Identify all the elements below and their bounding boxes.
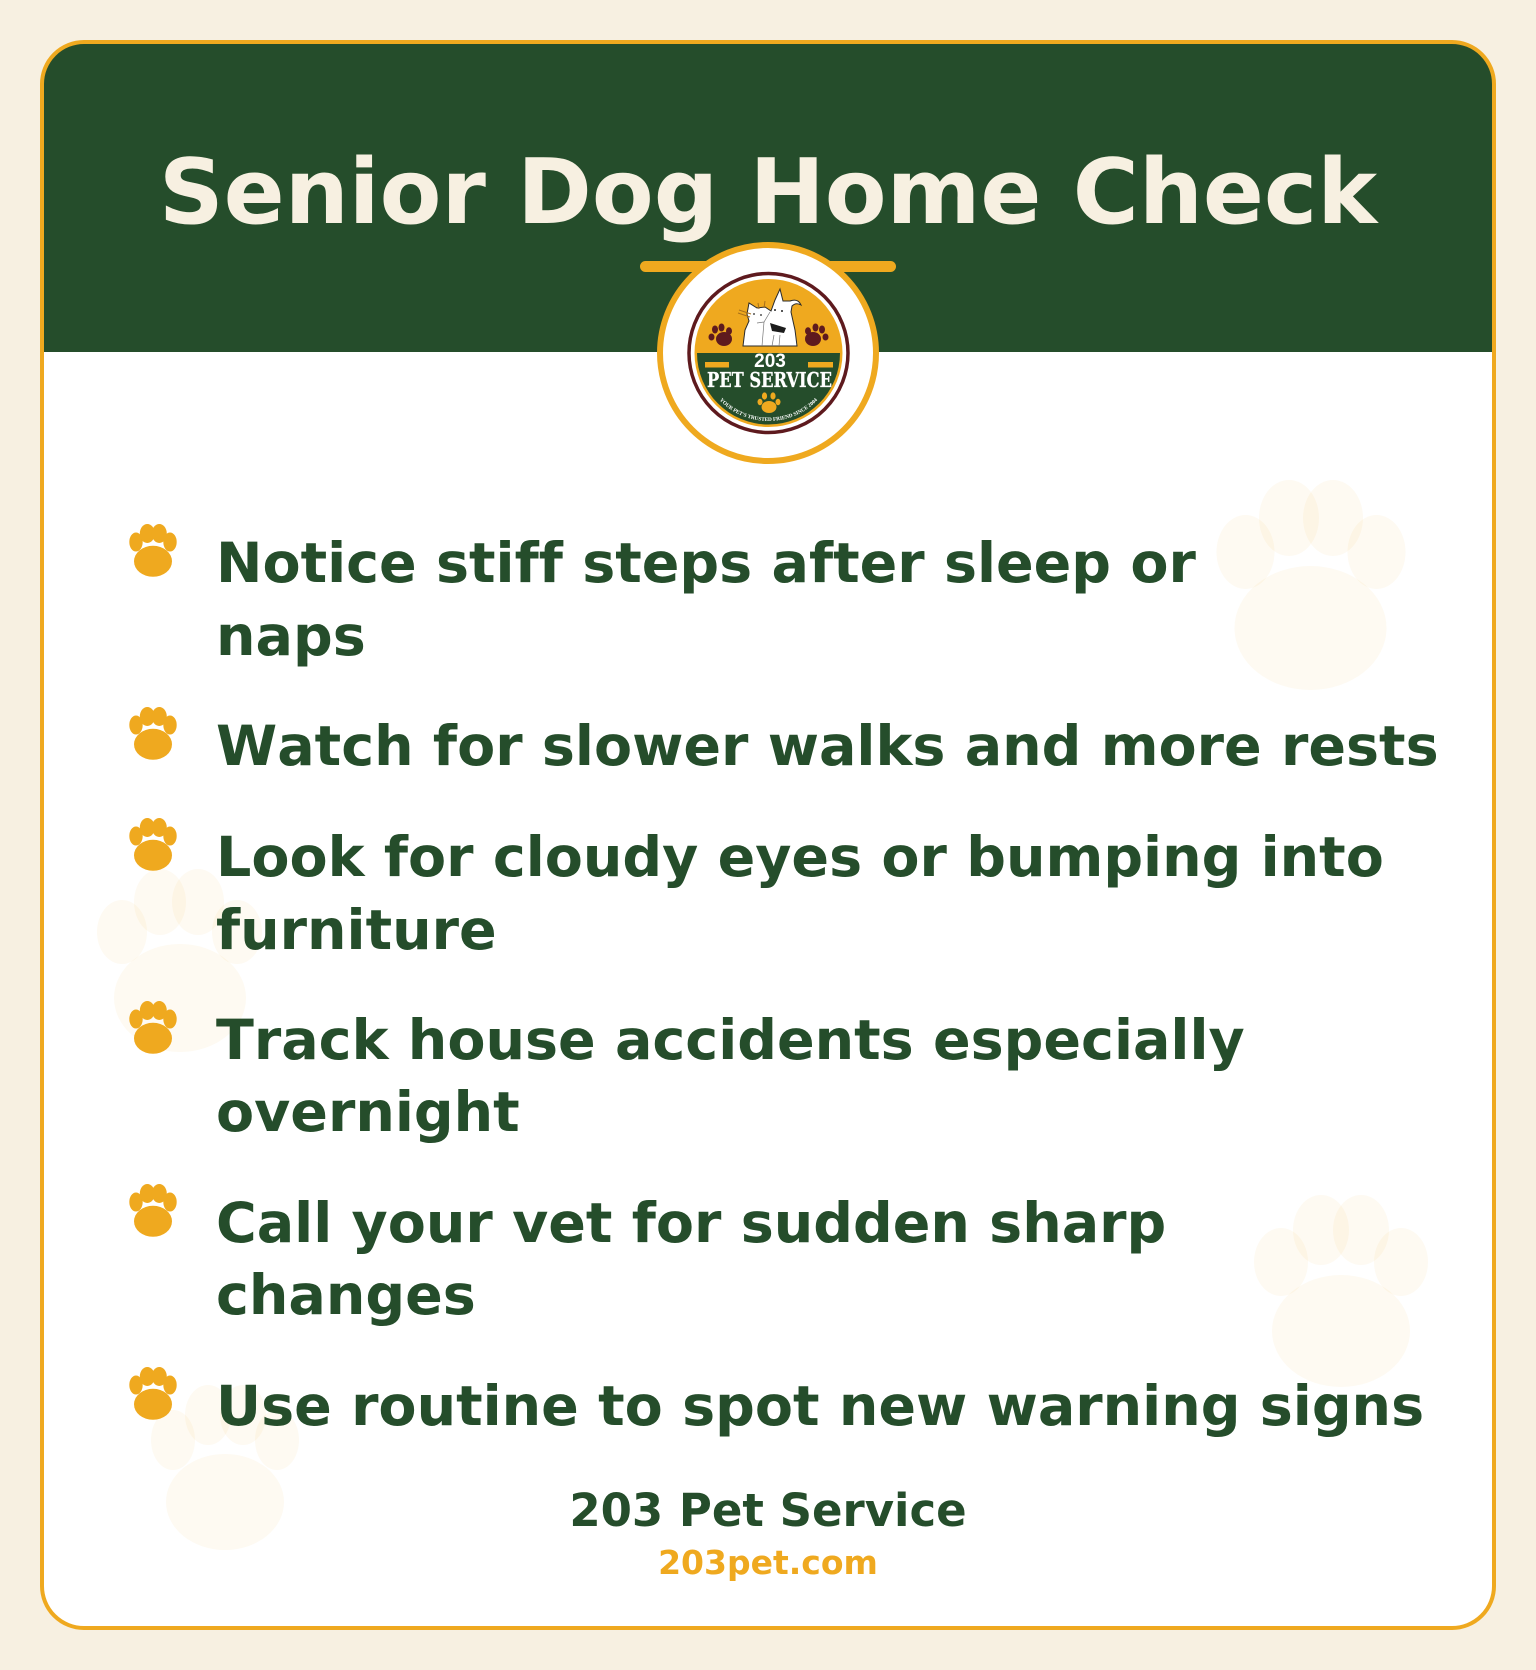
logo bars — [705, 362, 833, 368]
logo disc — [694, 279, 842, 427]
title: Senior Dog Home Check — [159, 140, 1377, 245]
list item 5: Call your vet for sudden sharp — [216, 1191, 1166, 1256]
bullet paw — [129, 524, 177, 577]
background paw: bottom right — [1254, 1195, 1428, 1387]
footer brand name: 203 Pet Service — [569, 1484, 967, 1537]
list item 1 — [129, 524, 1196, 669]
list item 6: Use routine to spot new warning signs — [216, 1374, 1424, 1439]
divider bar — [640, 261, 896, 272]
logo cat and dog — [738, 289, 801, 346]
list item 4: overnight — [216, 1080, 520, 1145]
logo text 203: 203 — [754, 351, 786, 372]
bullet paw — [129, 818, 177, 871]
bullet paw — [129, 1367, 177, 1420]
logo paw left — [708, 324, 732, 346]
list item 5: changes — [216, 1263, 476, 1328]
list item 4: Track house accidents especially — [216, 1008, 1245, 1073]
logo small paw — [758, 392, 780, 413]
list item 3: furniture — [216, 898, 497, 963]
background paw: bottom left — [151, 1385, 299, 1550]
list item 1: Notice stiff steps after sleep or — [216, 531, 1196, 596]
list item 1: naps — [216, 604, 366, 669]
background paw: left middle — [97, 869, 262, 1052]
list item 2: Watch for slower walks and more rests — [216, 714, 1439, 779]
header band — [40, 40, 1496, 352]
bullet paw — [129, 707, 177, 760]
logo text pet service: PET SERVICE — [707, 368, 832, 392]
list item 4 — [129, 1001, 1245, 1145]
background paw: top right — [1216, 480, 1406, 690]
bullet paw — [129, 1001, 177, 1054]
logo paw right — [805, 324, 828, 346]
list item 5 — [129, 1184, 1166, 1328]
footer website: 203pet.com — [658, 1543, 878, 1582]
logo badge — [657, 242, 879, 464]
list item 3 — [129, 818, 1384, 963]
bullet paw — [129, 1184, 177, 1237]
logo curved tagline: YOUR PET'S TRUSTED FRIEND SINCE 2004 — [720, 398, 818, 421]
list item 3: Look for cloudy eyes or bumping into — [216, 825, 1384, 890]
